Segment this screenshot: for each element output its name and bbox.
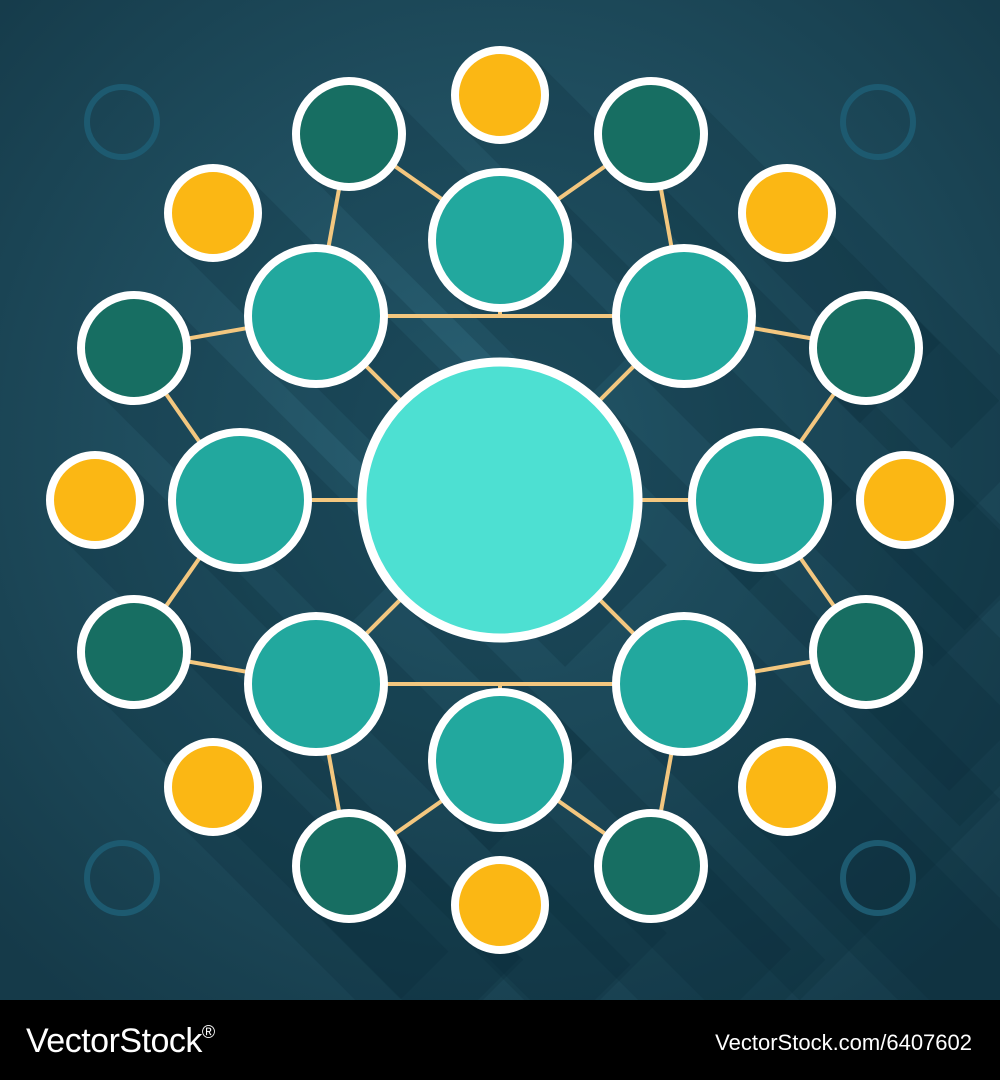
mid circles xyxy=(172,172,828,828)
corner rings xyxy=(87,87,913,913)
long shadows xyxy=(95,95,1000,1000)
footer bar xyxy=(0,1000,1000,1080)
footer bar: VectorStock.com/6407602 xyxy=(715,1030,972,1055)
connector lines xyxy=(134,134,866,866)
center circle xyxy=(362,362,638,638)
yellow circles xyxy=(50,50,950,950)
outer dark circles xyxy=(81,81,919,919)
footer bar: VectorStock xyxy=(26,1022,202,1060)
footer bar: ® xyxy=(202,1022,215,1042)
